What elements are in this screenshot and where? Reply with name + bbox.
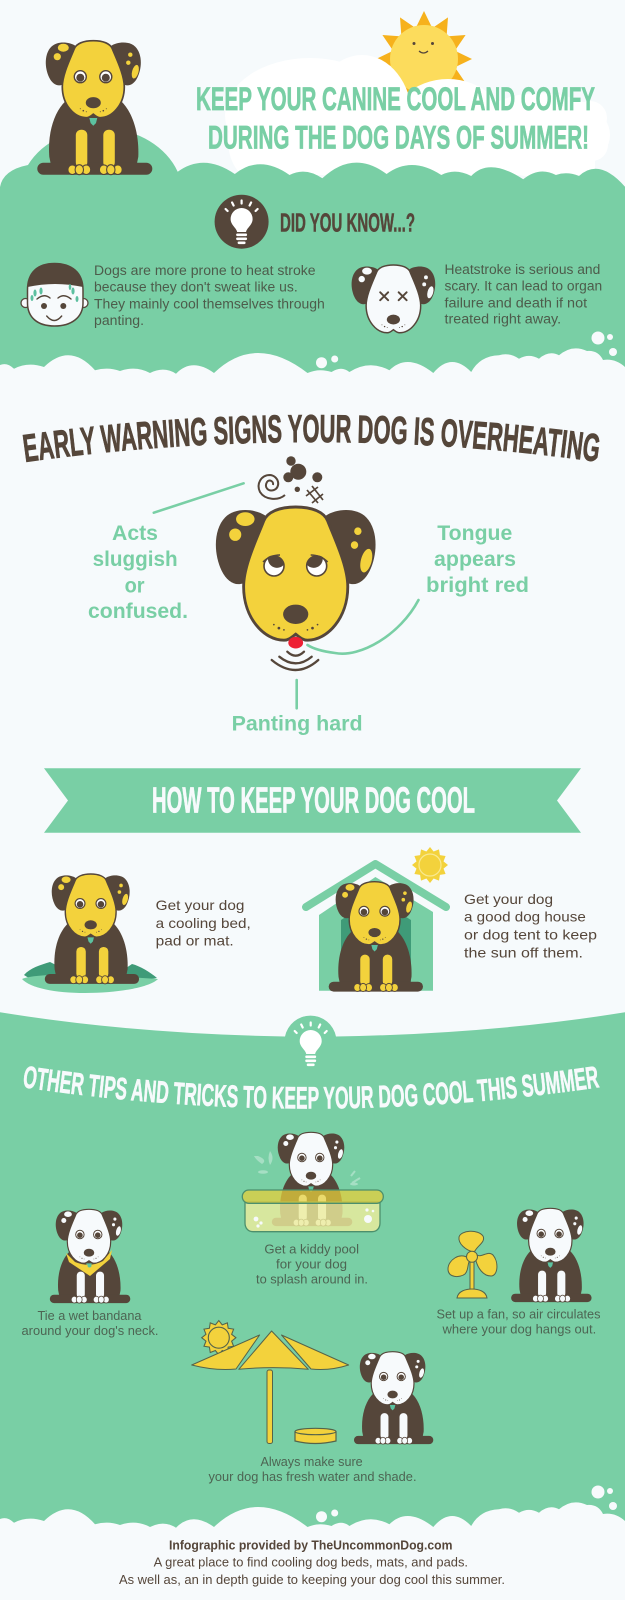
panel: did you know [0,128,625,400]
footer: As well as, an in depth guide to keeping your dog cool this summer. [119,1573,505,1587]
icon: dog on cooling mat [22,874,158,993]
label: tongue bright red: bright red [426,574,529,597]
heading: early warning signs: EARLY WARNING SIGNS YOUR DOG IS OVERHEATING [22,414,600,462]
arrow: to tongue label [308,600,418,654]
icon: small sun [412,847,448,883]
icon: sweating boy [21,264,88,326]
cloud edge: footer top [0,1486,625,1600]
white cloud behind title [225,55,610,193]
icon: dog with bandana [50,1209,130,1303]
text: good dog house: Get your dog [464,891,553,907]
footer: A great place to find cooling dog beds, mats, and pads. [154,1556,468,1570]
heading: did you know: DID YOU KNOW...? [280,210,415,238]
text: water and shade [208,1455,416,1484]
label: tongue bright red: appears [434,548,516,571]
text: bandana [22,1309,158,1338]
text: water and shade: your dog has fresh water and shade. [208,1470,416,1484]
icon: dog in shade [354,1352,433,1444]
icon: umbrella [192,1331,349,1444]
text: cooling bed [156,897,251,949]
text: heatstroke is serious: Heatstroke is serious and [444,262,600,277]
text: bandana: around your dog's neck. [22,1324,158,1338]
icon: umbrella sun [202,1321,236,1355]
icon: dog beside fan [511,1208,592,1302]
text: dogs are prone: Dogs are more prone to heat stroke [94,263,316,278]
text: fan: Set up a fan, so air circulates [436,1307,600,1321]
footer: Infographic provided by TheUncommonDog.com [169,1538,452,1552]
arrow: to sluggish label [154,483,244,513]
label: acts sluggish [88,522,188,623]
text: good dog house: or dog tent to keep [464,926,597,942]
text: kiddy pool: Get a kiddy pool [264,1242,359,1256]
text: heatstroke is serious: scary. It can lead to organ [444,279,602,294]
icon: smiling sun [376,11,472,107]
panel: other tips and tricks [0,1012,625,1560]
text: dogs are prone: because they don't sweat like us. [94,280,298,295]
text: heatstroke is serious: failure and death if not [444,295,587,310]
arrow: to panting label [295,680,298,708]
cloud edge: did you know bottom [0,332,625,460]
text: water and shade: Always make sure [260,1455,363,1469]
footer [119,1538,505,1587]
label: acts sluggish: Acts [112,522,158,545]
icon: water bowl [295,1428,336,1444]
text: heatstroke is serious [444,262,602,326]
text: bandana: Tie a wet bandana [38,1309,142,1323]
text: good dog house [464,891,597,960]
icon: left sad eye [263,555,284,576]
label: tongue bright red [426,522,529,597]
label: tongue bright red: Tongue [437,522,512,545]
title [196,80,595,155]
text: cooling bed: Get your dog [156,897,244,913]
icon: red tongue [288,637,303,648]
text: kiddy pool [256,1242,368,1286]
icon: panting waves [272,652,318,670]
text: dogs are prone [94,263,325,328]
icon: overheating dog head [216,507,376,640]
icon: right sad eye [307,555,328,576]
icon: dog house [306,864,446,992]
text: fan [436,1307,600,1336]
text: good dog house: a good dog house [464,909,586,925]
banner: how to keep your dog cool [44,768,581,833]
label: panting hard: Panting hard [232,713,363,736]
icon: dog in kiddy pool [242,1132,383,1232]
label: acts sluggish: sluggish [93,548,178,571]
text: kiddy pool: for your dog [276,1257,347,1271]
heading: other tips: OTHER TIPS AND TRICKS TO KEEP YOUR DOG COOL THIS SUMMER [24,1066,600,1109]
text: dogs are prone: They mainly cool themselves through [94,296,325,311]
icon: header dog [37,41,152,175]
text: cooling bed: pad or mat. [156,933,234,949]
icon: fan [448,1231,497,1298]
text: heatstroke is serious: treated right away. [444,311,561,326]
text: kiddy pool: to splash around in. [256,1272,368,1286]
icon: white lightbulb [295,1022,327,1066]
icon: lightbulb badge [215,195,269,249]
text: dogs are prone: panting. [94,313,144,328]
text: fan: where your dog hangs out. [441,1322,596,1336]
text: good dog house: the sun off them. [464,944,583,960]
icon: confusion swirl [259,456,323,503]
label: acts sluggish: or [125,575,145,598]
label: acts sluggish: confused. [88,600,188,623]
icon: dog with x eyes [352,265,435,333]
text: cooling bed: a cooling bed, [156,915,251,931]
